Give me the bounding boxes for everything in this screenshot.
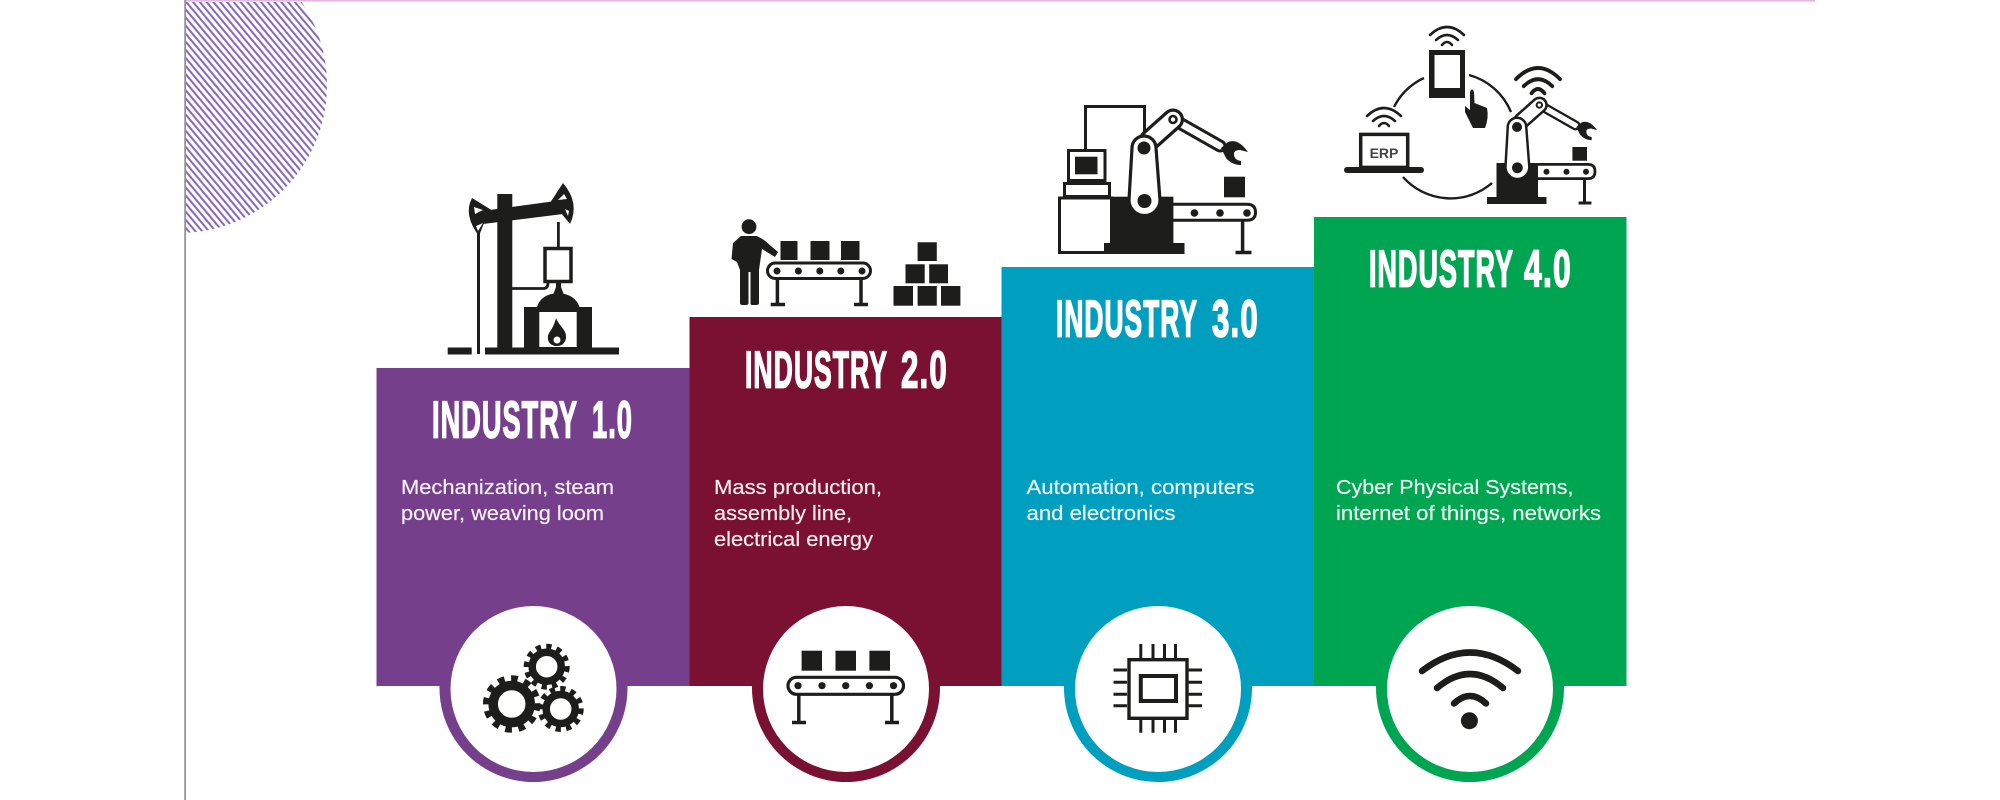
top rule [185,0,1815,2]
heading: INDUSTRY [745,342,888,400]
description: Cyber Physical Systems, [1336,476,1574,499]
circle badge [752,594,940,782]
description [1026,476,1254,525]
icon: worker at assembly line with stacked boxes [732,219,960,306]
circle badge [1064,594,1252,782]
description [401,476,614,525]
circle badge [440,594,628,782]
description [1336,476,1601,525]
heading: 3.0 [1212,290,1259,348]
icon: conveyor belt [788,651,904,722]
bar [690,317,1002,686]
description: internet of things, networks [1336,502,1601,525]
description [714,476,882,551]
heading: 1.0 [592,392,633,450]
description: power, weaving loom [401,502,604,525]
panel: Industry 1.0 [376,183,690,782]
icon: robot arm, computer and conveyor [1060,106,1256,254]
panel: Industry 3.0 [1002,106,1314,782]
hatched circle decoration [186,2,336,242]
description: electrical energy [714,528,874,551]
panel: Industry 2.0 [690,219,1002,782]
description: assembly line, [714,502,852,525]
icon: microchip [1114,644,1202,733]
heading: INDUSTRY [1369,240,1514,298]
heading: INDUSTRY [1056,290,1198,348]
description: Mechanization, steam [401,476,614,499]
description: Mass production, [714,476,882,499]
panel: Industry 4.0 [1314,27,1626,782]
icon: gears [486,647,581,730]
left rule [184,0,186,800]
description: Automation, computers [1026,476,1254,499]
heading: INDUSTRY [432,392,578,450]
heading: 2.0 [901,342,948,400]
icon: connected devices loop [1344,27,1597,204]
bar [376,368,690,686]
description: and electronics [1026,502,1176,525]
bar [1002,267,1314,686]
icon: steam pump and furnace [448,183,619,354]
circle badge [1376,594,1564,782]
icon: wifi signal [1422,652,1518,729]
heading: 4.0 [1524,240,1572,298]
icon: connected devices loop: ERP [1370,145,1398,161]
bar [1314,217,1626,686]
